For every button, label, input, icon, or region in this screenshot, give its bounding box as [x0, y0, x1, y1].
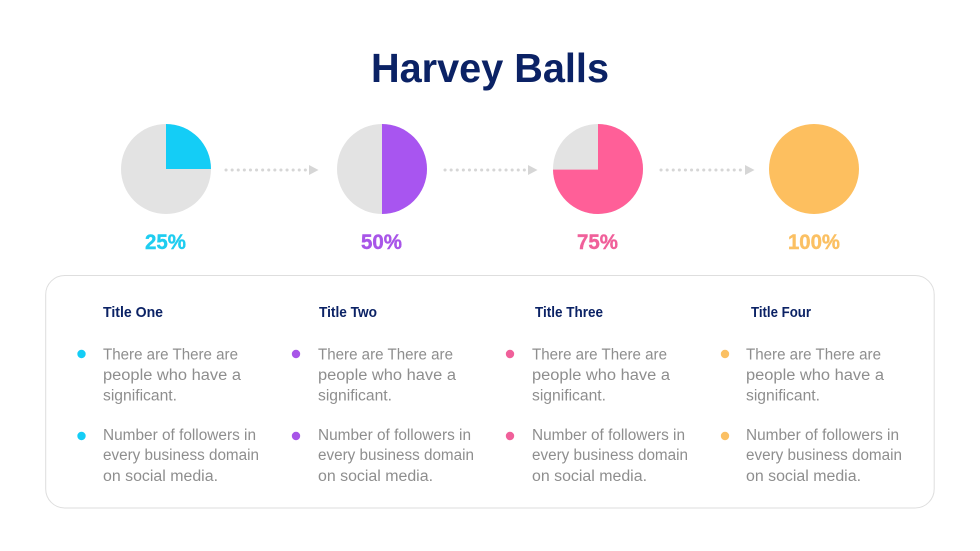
text block 1: There are There are — [532, 346, 667, 364]
text block 2 — [318, 427, 474, 485]
arrow: 25 to 50 — [226, 165, 318, 175]
text block 1: significant. — [103, 388, 177, 404]
text block 2: on social media. — [532, 468, 647, 485]
bullet 2 — [721, 432, 729, 440]
column: title three — [506, 304, 688, 485]
text block 2: Number of followers in — [103, 427, 256, 444]
bullet 1 — [292, 350, 300, 358]
text block 1: significant. — [532, 388, 606, 404]
text block 2: on social media. — [746, 468, 861, 485]
text block 2: Number of followers in — [318, 427, 471, 444]
harvey ball: 50% — [337, 124, 427, 214]
text block 1: significant. — [318, 388, 392, 404]
text block 2 — [103, 427, 259, 485]
text block 1: people who have a — [746, 367, 884, 384]
heading: Title Four — [751, 304, 811, 321]
bullet 2 — [292, 432, 300, 440]
heading: Title Two — [319, 304, 377, 321]
bullet 1 — [721, 350, 729, 358]
bullet 1 — [77, 350, 86, 358]
column: title two — [292, 304, 474, 485]
text block 1: people who have a — [532, 367, 670, 384]
heading: Title One — [103, 304, 163, 321]
text block 2 — [532, 427, 688, 485]
text block 1: There are There are — [318, 346, 453, 364]
harvey ball: 25% — [121, 124, 211, 214]
bullet 1 — [506, 350, 514, 358]
text block 2: Number of followers in — [746, 427, 899, 444]
text block 1: people who have a — [103, 367, 241, 384]
panel: details — [46, 276, 934, 508]
label: 50%: 50% — [361, 231, 402, 254]
column: title one — [77, 304, 259, 485]
text block 2: every business domain — [103, 447, 259, 464]
text block 1 — [532, 346, 670, 404]
text block 2 — [746, 427, 902, 485]
bullet 2 — [506, 432, 514, 440]
bullet 2 — [77, 432, 86, 440]
title: Harvey Balls — [371, 45, 609, 91]
harvey ball: 75% — [553, 124, 643, 214]
text block 2: on social media. — [103, 468, 218, 485]
arrow: 50 to 75 — [445, 165, 538, 175]
harvey ball: 100% — [769, 124, 859, 214]
text block 1: significant. — [746, 388, 820, 404]
text block 1 — [746, 346, 884, 404]
text block 2: every business domain — [532, 447, 688, 464]
column: title four — [721, 304, 902, 485]
text block 1: There are There are — [103, 346, 238, 364]
label: 75%: 75% — [577, 231, 618, 254]
text block 1: people who have a — [318, 367, 456, 384]
text block 2: on social media. — [318, 468, 433, 485]
label: 25%: 25% — [145, 231, 186, 254]
arrow: 75 to 100 — [661, 165, 754, 175]
label: 100%: 100% — [788, 231, 840, 254]
text block 2: every business domain — [746, 447, 902, 464]
heading: Title Three — [535, 304, 603, 321]
text block 2: Number of followers in — [532, 427, 685, 444]
text block 1 — [103, 346, 241, 404]
text block 1 — [318, 346, 456, 404]
text block 2: every business domain — [318, 447, 474, 464]
text block 1: There are There are — [746, 346, 881, 364]
